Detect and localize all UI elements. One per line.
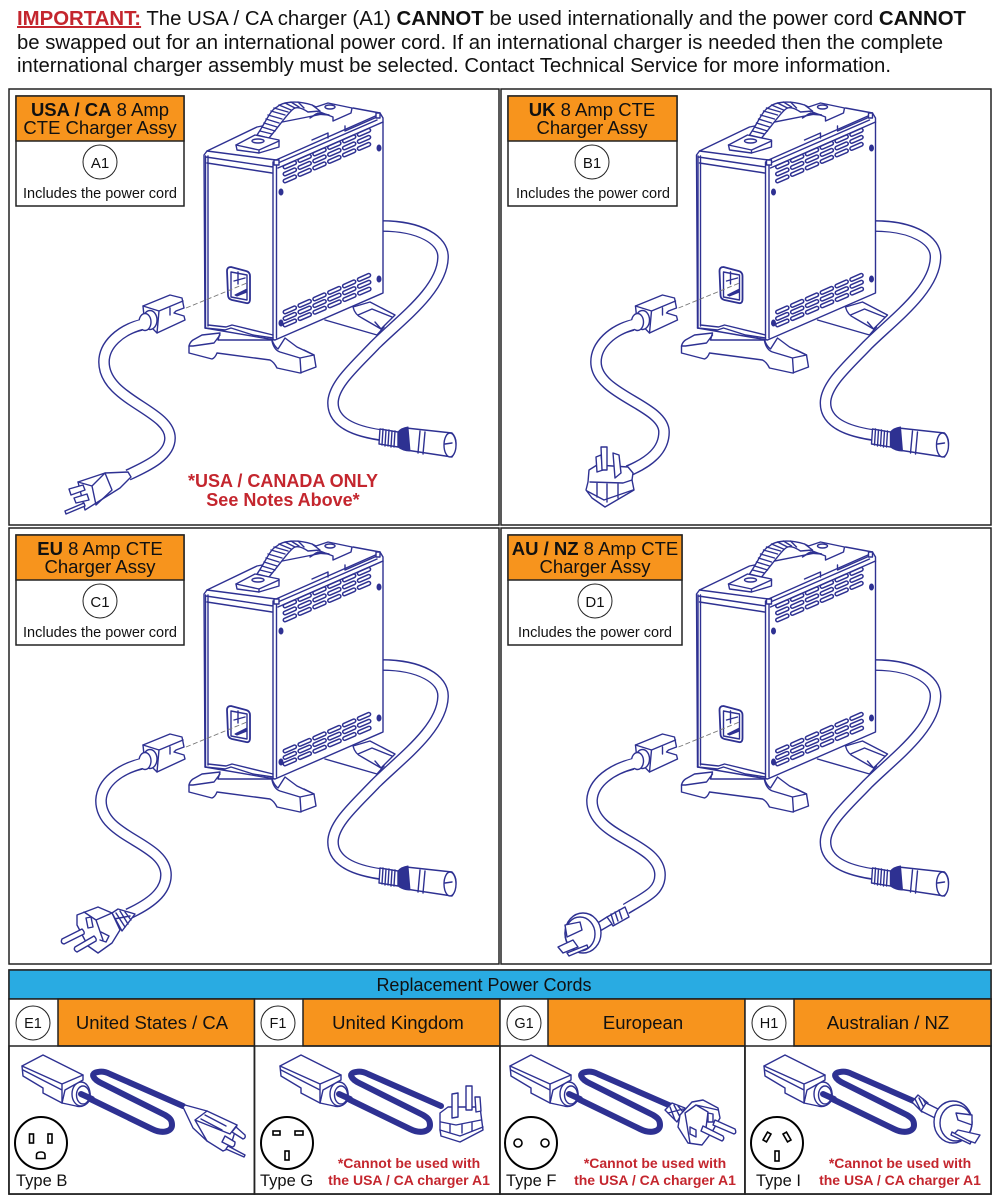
column: European bbox=[500, 999, 745, 1194]
column: United States / CA: E1 bbox=[24, 1016, 42, 1032]
column: United Kingdom bbox=[254, 999, 500, 1194]
column: United Kingdom: F1 bbox=[270, 1016, 286, 1032]
charger illustration A1 bbox=[139, 102, 456, 457]
charger illustration B1 bbox=[632, 102, 948, 457]
column: Australian / NZ: Australian / NZ bbox=[827, 1012, 949, 1033]
column: United Kingdom: United Kingdom bbox=[332, 1012, 464, 1033]
socket type I bbox=[751, 1117, 803, 1169]
warning note: *Cannot be used with bbox=[338, 1155, 480, 1171]
warning note: the USA / CA charger A1 bbox=[328, 1172, 490, 1188]
UK power cord and plug bbox=[586, 324, 664, 507]
important notice: international charger assembly must be selected. Contact Technical Service for more information. bbox=[17, 55, 891, 77]
socket type G bbox=[261, 1117, 313, 1169]
EU power cord and plug bbox=[61, 763, 166, 953]
warning note: the USA / CA charger A1 bbox=[819, 1172, 981, 1188]
label box B1: UK 8 Amp CTE bbox=[529, 99, 655, 120]
warning note bbox=[574, 1155, 736, 1188]
label box B1: Charger Assy bbox=[536, 117, 648, 138]
warning note: *Cannot be used with bbox=[584, 1155, 726, 1171]
label box C1: Includes the power cord bbox=[23, 625, 177, 641]
label box C1: EU 8 Amp CTE bbox=[37, 538, 163, 559]
socket type F bbox=[505, 1117, 557, 1169]
warning note bbox=[819, 1155, 981, 1188]
column: European: G1 bbox=[514, 1016, 534, 1032]
label box D1: AU / NZ 8 Amp CTE bbox=[512, 538, 678, 559]
label box B1: B1 bbox=[583, 155, 601, 172]
warning note: the USA / CA charger A1 bbox=[574, 1172, 736, 1188]
charger illustration C1 bbox=[139, 541, 456, 896]
USA power cord and plug bbox=[65, 324, 170, 514]
warning note bbox=[328, 1155, 490, 1188]
label box C1 bbox=[16, 535, 184, 645]
panel: EU charger bbox=[9, 528, 499, 964]
AU / NZ plug bbox=[912, 1095, 980, 1144]
label box A1: A1 bbox=[91, 155, 109, 172]
EU plug bbox=[665, 1100, 736, 1145]
label box A1: CTE Charger Assy bbox=[23, 117, 177, 138]
heading: replacement power cords bbox=[9, 970, 991, 999]
label box B1 bbox=[508, 96, 677, 206]
warning note: *Cannot be used with bbox=[829, 1155, 971, 1171]
label box C1: Charger Assy bbox=[44, 556, 156, 577]
column: United States / CA: United States / CA bbox=[76, 1012, 229, 1033]
label box A1 bbox=[16, 96, 184, 206]
panel: AU / NZ charger bbox=[501, 528, 991, 964]
important notice: be swapped out for an international power cord. If an international charger is needed then the complete bbox=[17, 32, 943, 54]
column: Australian / NZ: H1 bbox=[760, 1016, 778, 1032]
label box A1: Includes the power cord bbox=[23, 186, 177, 202]
column: United Kingdom: Type G bbox=[260, 1172, 313, 1190]
label box B1: Includes the power cord bbox=[516, 186, 670, 202]
label box C1: C1 bbox=[90, 594, 110, 611]
column: European: Type F bbox=[506, 1172, 556, 1190]
column: Australian / NZ bbox=[745, 999, 991, 1194]
warning: USA / Canada only: See Notes Above* bbox=[206, 490, 360, 510]
UK plug bbox=[440, 1086, 483, 1142]
US plug bbox=[183, 1105, 245, 1157]
AU / NZ power cord and plug bbox=[558, 763, 660, 956]
label box D1: D1 bbox=[585, 594, 605, 611]
label box D1: Charger Assy bbox=[539, 556, 651, 577]
panel: UK charger bbox=[501, 89, 991, 525]
panel: replacement power cords bbox=[9, 970, 991, 1194]
column: United States / CA: Type B bbox=[16, 1172, 67, 1190]
column: United States / CA bbox=[9, 999, 254, 1194]
important notice bbox=[17, 8, 966, 77]
heading: replacement power cords: Replacement Power Cords bbox=[376, 975, 592, 995]
charger illustration D1 bbox=[632, 541, 948, 896]
column: European: European bbox=[603, 1012, 683, 1033]
socket type B bbox=[15, 1117, 67, 1169]
warning: USA / Canada only: *USA / CANADA ONLY bbox=[188, 471, 378, 491]
label box D1 bbox=[508, 535, 682, 645]
warning: USA / Canada only bbox=[188, 471, 378, 510]
label box D1: Includes the power cord bbox=[518, 625, 672, 641]
label box A1: USA / CA 8 Amp bbox=[31, 99, 169, 120]
panel: USA / CA charger bbox=[9, 89, 499, 525]
important notice: IMPORTANT: The USA / CA charger (A1) CANNOT be used internationally and the power cord CANNOT bbox=[17, 8, 966, 30]
column: Australian / NZ: Type I bbox=[756, 1172, 801, 1190]
